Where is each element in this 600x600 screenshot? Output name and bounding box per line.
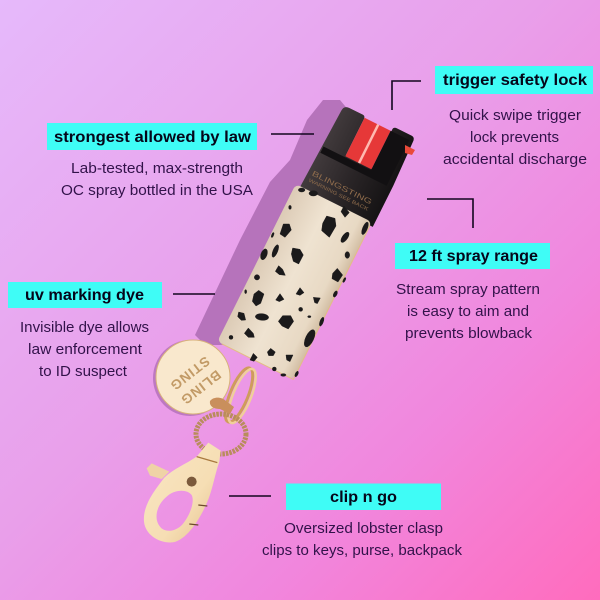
gold rim [222,190,370,379]
label text: 12 ft spray range [409,248,538,265]
description [396,282,540,342]
label text: uv marking dye [25,287,144,304]
coin tag [156,340,230,414]
description: to ID suspect [39,364,127,380]
label [286,484,441,510]
red tab [405,145,415,155]
callout: trigger safety lock [392,66,593,168]
leader line [392,81,421,110]
callout: 12 ft spray range [395,199,550,342]
description: prevents blowback [405,326,533,342]
cream body [217,184,372,379]
rivet [187,477,197,487]
keychain rings [196,365,261,454]
cap label [307,169,374,213]
callout: clip n go [229,484,463,559]
textured ring [196,414,246,454]
description: OC spray bottled in the USA [61,183,253,199]
description: Quick swipe trigger [449,108,581,124]
label [395,243,550,269]
coin text [167,353,224,408]
description: Oversized lobster clasp [284,521,443,537]
cap label: WARNING SEE BACK [307,178,370,213]
small ring connector [210,398,234,414]
description [61,161,253,199]
description: Stream spray pattern [396,282,540,298]
description: clips to keys, purse, backpack [262,543,463,559]
callout: strongest allowed by law [47,123,314,199]
description: Lab-tested, max-strength [71,161,243,177]
label [8,282,162,308]
cap label: BLINGSTING [311,169,374,206]
coin text: BLING [178,367,224,408]
lobster clasp [144,443,221,543]
label text: clip n go [330,489,397,506]
leader line [271,133,314,135]
leader line [173,293,215,295]
label text: trigger safety lock [443,72,587,89]
callout: uv marking dye [8,282,215,380]
pepper spray bottle [217,99,417,381]
leader line [229,495,271,497]
description: Invisible dye allows [20,320,149,336]
description [443,108,587,168]
bottle shadow [195,100,350,345]
dalmatian spots [229,188,370,377]
coin text: STING [167,353,213,394]
split ring [220,365,258,425]
description: lock prevents [470,130,559,146]
description [262,521,463,559]
label text: strongest allowed by law [54,129,252,146]
red trigger [345,118,391,169]
label [435,66,593,94]
leader line [427,199,473,228]
cap [298,101,417,227]
coin shadow [153,340,227,416]
description: law enforcement [28,342,142,358]
description [20,320,149,380]
description: is easy to aim and [407,304,529,320]
cap notch [320,107,409,186]
label [47,123,257,150]
description: accidental discharge [443,152,587,168]
